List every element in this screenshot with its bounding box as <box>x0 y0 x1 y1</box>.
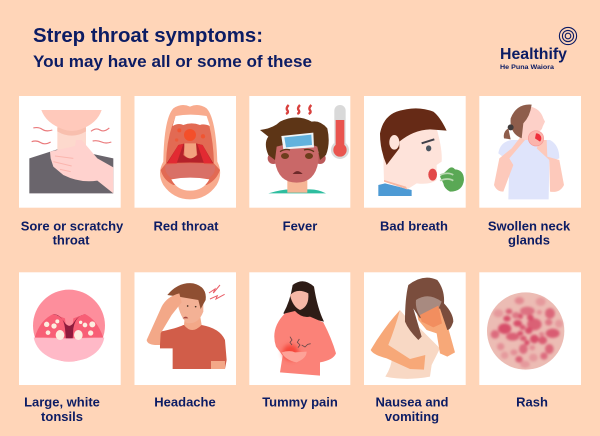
icon: man with bad breath <box>378 108 464 196</box>
icon: woman holding neck <box>494 105 564 199</box>
label: Swollen neck <box>488 218 571 234</box>
panel: fever <box>249 96 350 234</box>
label: throat <box>53 232 90 248</box>
panel: red throat <box>134 96 236 234</box>
label: Large, white <box>24 394 100 410</box>
panel: bad breath <box>364 96 466 234</box>
title: Strep throat symptoms: <box>33 24 263 47</box>
logo tagline: He Puna Waiora <box>500 64 554 71</box>
label: Headache <box>154 394 216 410</box>
label: Tummy pain <box>262 394 338 410</box>
panel: rash <box>479 272 581 410</box>
label: vomiting <box>385 409 439 424</box>
logo: Healthify <box>500 27 577 71</box>
label: Red throat <box>154 218 219 234</box>
label: Nausea and <box>376 394 449 410</box>
label: glands <box>508 232 550 248</box>
logo rings <box>559 27 577 45</box>
logo name: Healthify <box>500 46 567 63</box>
icon: feverish boy <box>260 105 349 193</box>
panel: nausea and vomiting <box>364 272 466 424</box>
icon: man with headache <box>147 283 227 369</box>
panel: swollen neck glands <box>479 96 581 248</box>
panel: tummy pain <box>249 272 350 410</box>
icon: skin rash <box>487 292 564 370</box>
icon: open mouth <box>160 105 220 199</box>
label: tonsils <box>41 409 83 424</box>
subtitle: You may have all or some of these <box>33 53 312 71</box>
icon: sore throat <box>29 110 113 193</box>
label: Bad breath <box>380 218 448 234</box>
label: Fever <box>283 218 317 234</box>
label: Rash <box>516 394 548 410</box>
icon: woman nauseous <box>371 278 455 379</box>
panel: headache <box>134 272 236 410</box>
panel: white tonsils <box>19 272 121 424</box>
icon: tonsils <box>33 290 105 362</box>
icon: woman with tummy pain <box>274 281 336 376</box>
label: Sore or scratchy <box>21 218 124 234</box>
panel: sore throat <box>19 96 124 248</box>
